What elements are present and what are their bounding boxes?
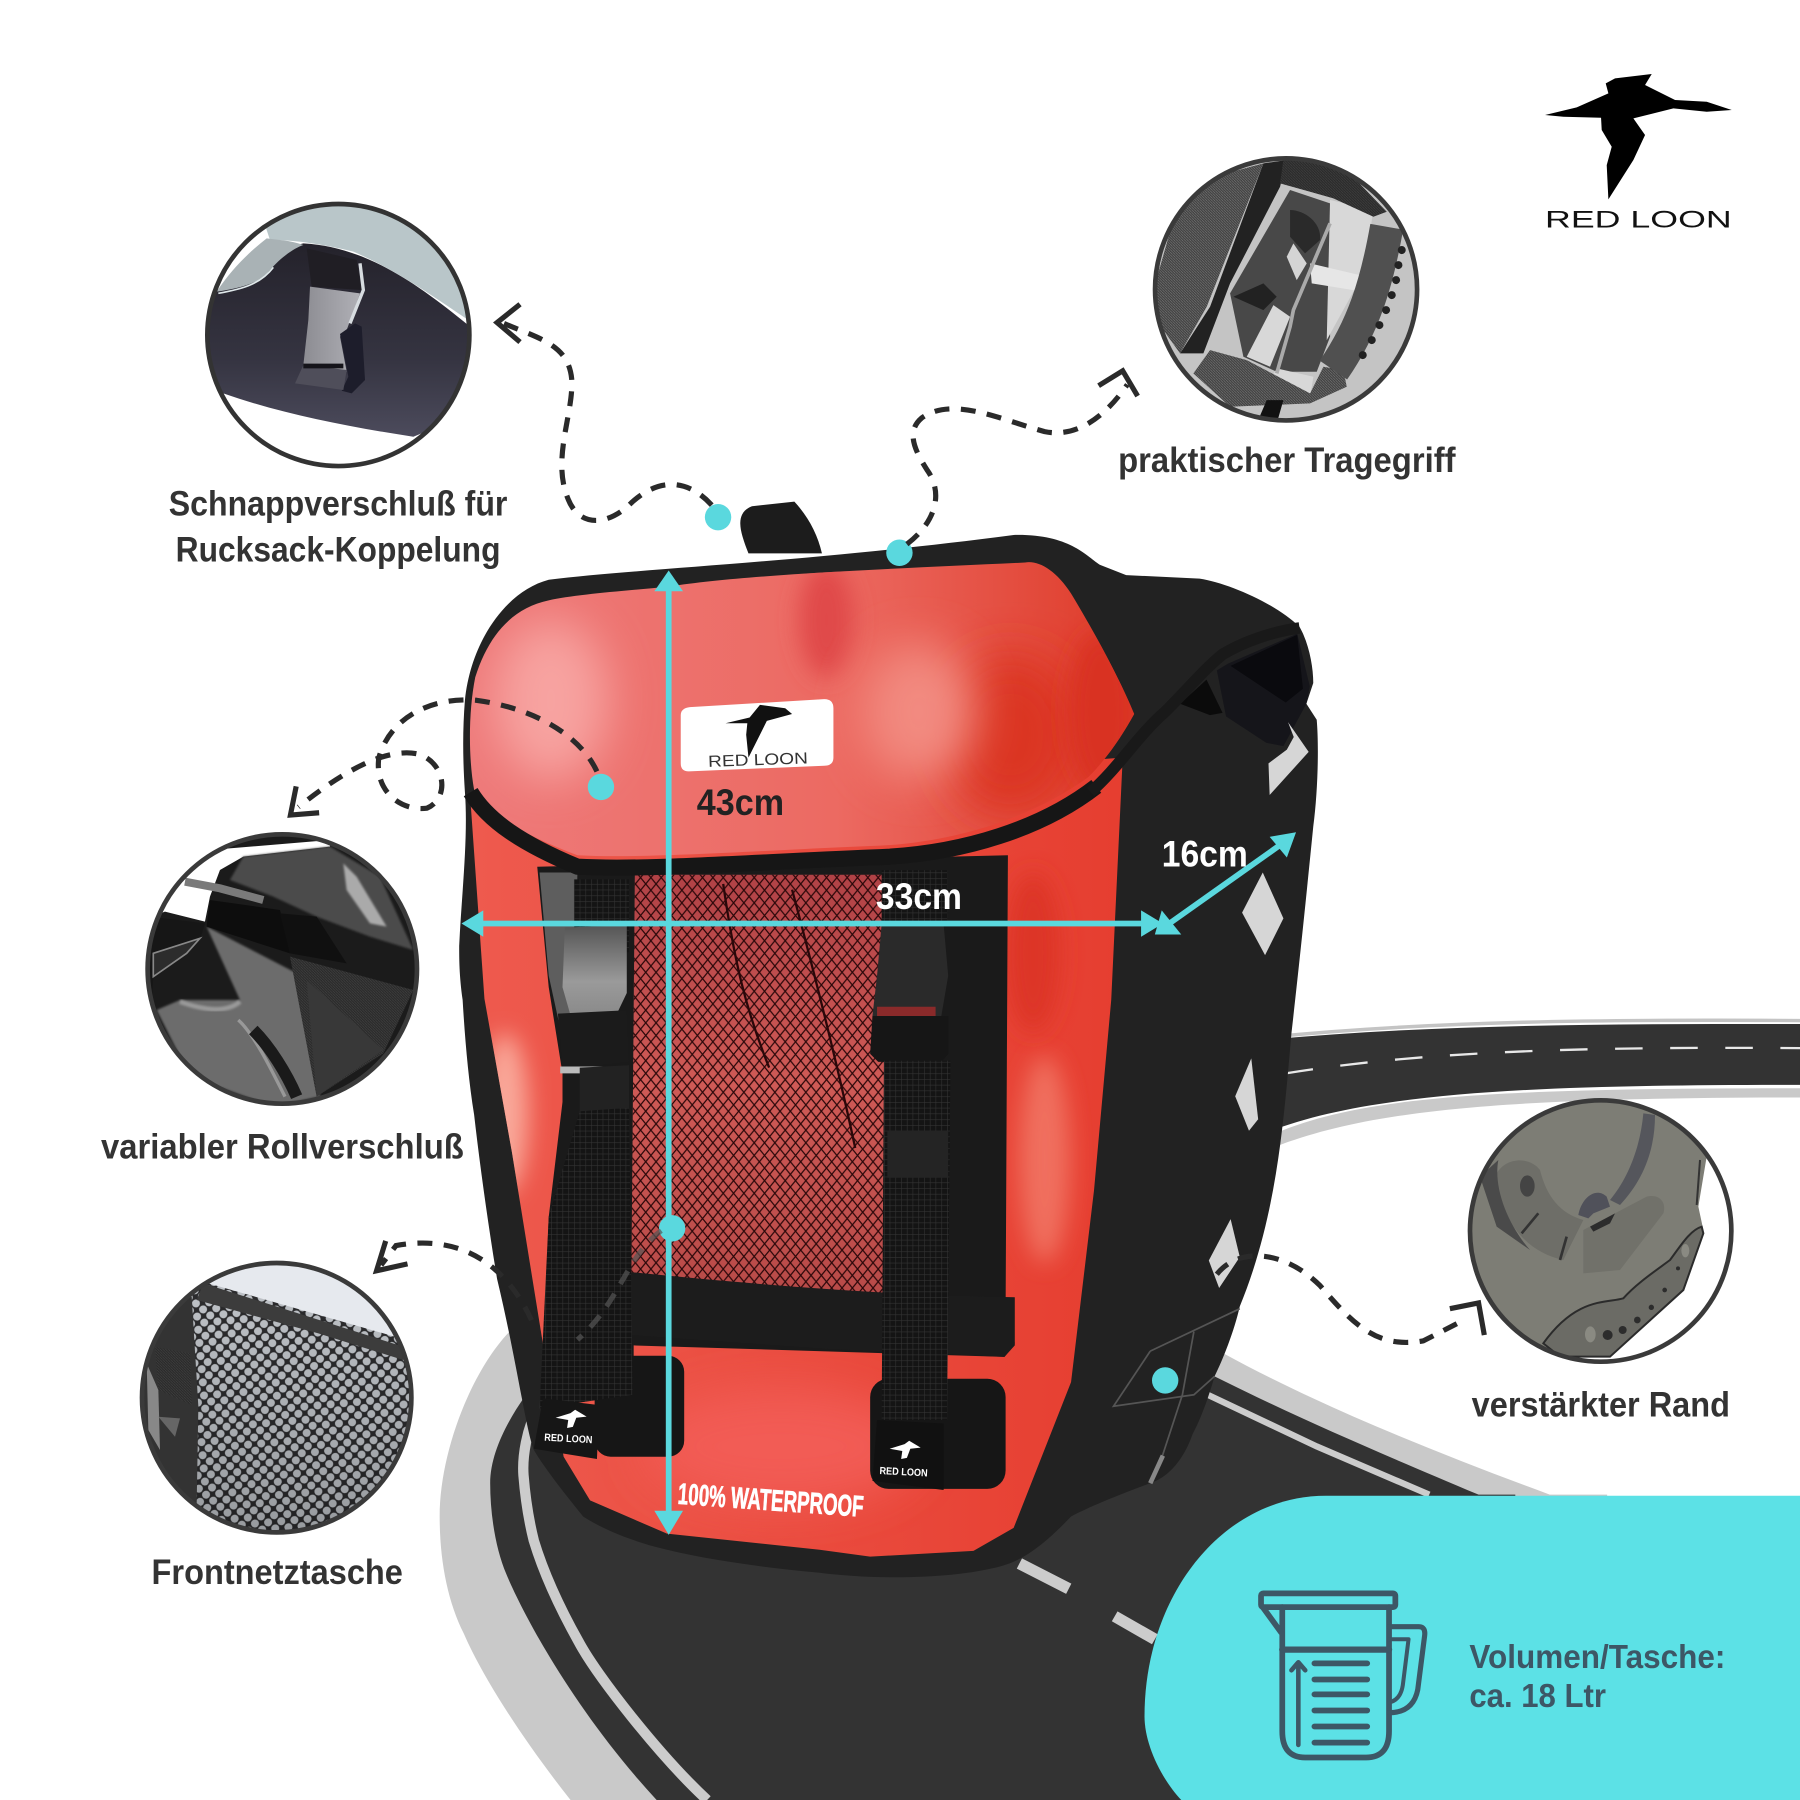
label: 33cm: 33cm [876, 876, 962, 917]
waterproof print: 100% WATERPROOF [677, 1478, 865, 1524]
dots [588, 504, 1178, 1394]
panel: snap lock detail [200, 200, 473, 466]
road background [440, 1020, 1800, 1800]
arrow: snap lock [497, 304, 712, 520]
arrow: carry handle [907, 371, 1138, 544]
flap [470, 562, 1299, 868]
road: upper curve [1263, 1020, 1800, 1148]
flap logo label: RED LOON [708, 749, 808, 771]
label: carry handle: praktischer Tragegriff [1118, 440, 1456, 480]
panel: reinforced edge detail [1470, 1100, 1731, 1362]
mesh pocket [631, 875, 895, 1295]
icon: measuring jug [1261, 1593, 1425, 1758]
bottom pocket left [595, 1356, 684, 1457]
arrow: height 43cm [654, 571, 683, 1535]
panel: carry handle detail [1153, 158, 1417, 423]
label: snap lock: Schnappverschluß für [169, 483, 508, 523]
reinforced corner [1114, 1309, 1240, 1483]
ring [1155, 158, 1417, 420]
flap logo label [681, 699, 833, 771]
volume text: ca. 18 Ltr [1469, 1678, 1606, 1715]
panel: roll closure detail [143, 834, 417, 1107]
dashed callout arrows [290, 304, 1484, 1342]
arrow: reinforced edge [1217, 1256, 1484, 1342]
center panel frame [537, 855, 1015, 1395]
arrow: width 33cm [461, 910, 1163, 937]
logo: RED LOON: RED LOON [1545, 207, 1732, 234]
panel: front net detail [138, 1257, 415, 1532]
bag handle [740, 502, 822, 553]
roll closure opening [1180, 634, 1310, 746]
logo: RED LOON [1545, 74, 1732, 234]
ring [1470, 1100, 1731, 1362]
label: roll closure: variabler Rollverschluß [101, 1126, 464, 1166]
feature labels [101, 440, 1730, 1592]
reflector strips [1209, 722, 1309, 1288]
arrow: front net pocket [377, 1231, 661, 1340]
bag body [459, 535, 1318, 1577]
arrow: depth 16cm [1155, 832, 1296, 934]
bag [459, 502, 1318, 1577]
road: lower curve [440, 1325, 1607, 1800]
bottom pocket right [870, 1379, 1006, 1489]
panel: volume [1145, 1496, 1800, 1800]
label: snap lock: Rucksack-Koppelung [176, 529, 501, 569]
volume text: Volumen/Tasche: [1469, 1639, 1725, 1676]
right strap [870, 870, 951, 1490]
ring [142, 1263, 411, 1532]
ring [207, 204, 469, 466]
bottom strip [629, 1272, 1015, 1357]
arrow: roll closure [290, 700, 597, 815]
ring [148, 834, 417, 1104]
label: 16cm: 16cm [1162, 834, 1248, 875]
dimension arrows [461, 504, 1296, 1535]
label: front net pocket: Frontnetztasche [152, 1552, 403, 1592]
right strap: RED LOON [879, 1466, 928, 1479]
red lower panel [471, 758, 1123, 1557]
label: reinforced edge: verstärkter Rand [1472, 1385, 1730, 1425]
left strap [534, 879, 633, 1459]
left strap: RED LOON [544, 1433, 593, 1446]
label: 43cm: 43cm [697, 782, 784, 823]
dimension labels [697, 782, 1248, 917]
